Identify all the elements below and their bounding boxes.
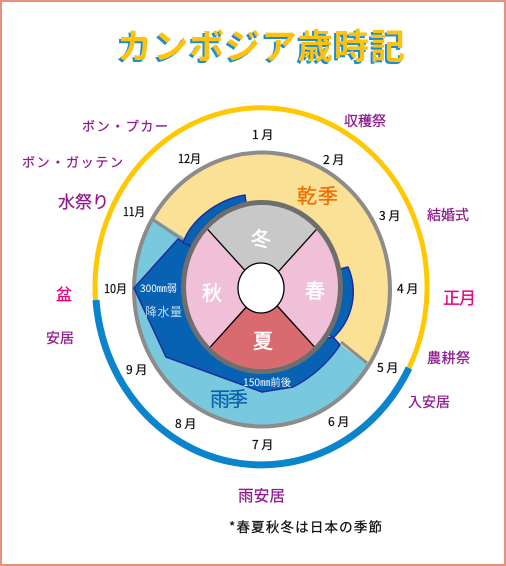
event: water festival: 水祭り (58, 188, 109, 213)
season: autumn: 秋 (202, 277, 222, 306)
month labels: 6 月 (328, 413, 349, 430)
rainy season label: 雨季 (210, 383, 248, 412)
month labels: 12月 (178, 150, 201, 167)
event: entering retreat: 入安居 (408, 392, 450, 412)
season boundaries (152, 219, 367, 363)
event: rainy retreat: 雨安居 (238, 484, 285, 506)
event: new year: 正月 (443, 284, 476, 309)
season: spring: 春 (305, 275, 325, 304)
rainy season band (136, 219, 367, 424)
month labels: 3 月 (379, 207, 400, 224)
month labels: 4 月 (397, 280, 418, 297)
rainfall label: 300mm: 300㎜弱 (140, 280, 177, 295)
event: Bon Pchum Ben: ボン・プカー (82, 116, 168, 135)
title: カンボジア歳時記 (117, 19, 405, 70)
month labels: 2 月 (323, 151, 344, 168)
rainfall label: 150mm: 150㎜前後 (243, 374, 291, 389)
dry season label: 乾季 (297, 180, 338, 209)
event: retreat: 安居 (46, 328, 74, 348)
event: Bon Katen: ボン・ガッテン (22, 152, 123, 171)
title: カンボジア歳時記 (115, 21, 403, 72)
band outline (134, 152, 390, 426)
month labels: 9 月 (126, 361, 147, 378)
season wheel (120, 152, 395, 440)
footnote: *春夏秋冬は日本の季節 (229, 516, 382, 536)
event: harvest festival: 収穫祭 (344, 111, 386, 131)
season: winter: 冬 (251, 223, 271, 252)
month labels: 8 月 (175, 415, 196, 432)
dry season band (134, 152, 390, 426)
month labels: 1 月 (252, 126, 273, 143)
rainfall chart (134, 195, 353, 392)
outer ring: dry and rainy season arcs (95, 108, 427, 465)
event: wedding: 結婚式 (427, 205, 469, 225)
month labels: 7 月 (252, 436, 273, 453)
season: summer: 夏 (253, 325, 273, 354)
rainfall label: precipitation: 降水量 (145, 303, 182, 320)
center circle (238, 263, 284, 313)
event: plowing festival: 農耕祭 (427, 348, 470, 368)
month labels: 11月 (123, 203, 145, 220)
seasons disc (181, 200, 343, 374)
month labels: 5 月 (377, 359, 398, 376)
month labels: 10月 (104, 280, 127, 297)
month labels (104, 126, 418, 453)
event: Obon: 盆 (56, 281, 72, 305)
